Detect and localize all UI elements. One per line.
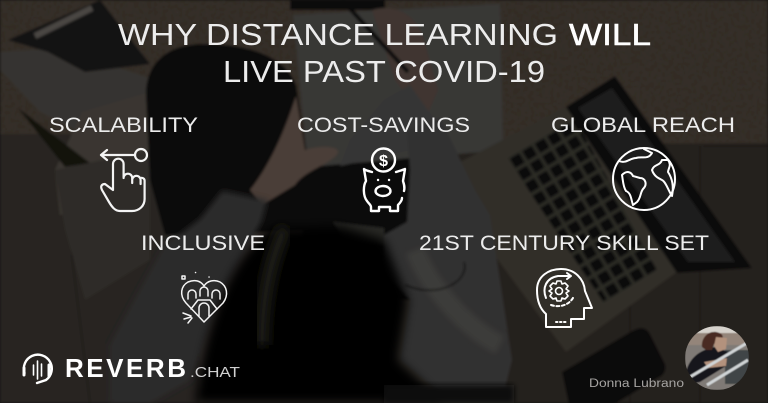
benefit: inclusive <box>141 232 265 323</box>
benefit: cost-savings <box>297 114 470 211</box>
bottom shadow <box>384 385 514 403</box>
title: LIVE PAST COVID-19 <box>223 54 545 89</box>
benefit: global reach <box>551 114 735 210</box>
sweater right <box>384 118 512 393</box>
heading: cost-savings: COST-SAVINGS <box>297 114 470 137</box>
author name: Donna Lubrano <box>589 378 684 390</box>
icon: piggy bank with coin <box>364 148 405 211</box>
sweater left <box>110 190 268 403</box>
title: WHY DISTANCE LEARNING <box>118 17 558 52</box>
hair <box>195 226 445 403</box>
heading: inclusive: INCLUSIVE <box>141 232 265 255</box>
icon: headset logo <box>24 355 52 383</box>
icon: piggy bank with coin: $ <box>379 153 388 170</box>
hair highlight <box>262 228 285 345</box>
wordmark: REVERB <box>65 353 186 383</box>
hand holding pen <box>372 8 438 120</box>
author photo <box>685 326 749 390</box>
author <box>589 326 749 390</box>
wood floor <box>0 134 768 403</box>
sleeve over notebook <box>340 85 435 166</box>
heading: global reach: GLOBAL REACH <box>551 114 735 137</box>
black trousers <box>146 44 340 235</box>
dark lap behind piggy icon <box>300 150 420 300</box>
logo: reverb.chat <box>24 353 240 383</box>
icon: globe <box>613 148 675 210</box>
benefit: 21st century skill set <box>419 232 709 327</box>
wordmark suffix: .CHAT <box>190 364 240 381</box>
left hand <box>250 96 338 205</box>
phone <box>562 328 665 403</box>
heading: scalability: SCALABILITY <box>49 114 198 137</box>
benefit: scalability <box>49 114 198 211</box>
sweater collar <box>333 222 384 245</box>
heading: 21st century skill set: 21ST CENTURY SKILL SET <box>419 232 709 255</box>
title <box>118 17 651 89</box>
papers and magazine <box>0 0 150 300</box>
title: WILL <box>569 17 651 52</box>
icon: swipe hand <box>101 149 147 211</box>
notebook <box>293 4 503 167</box>
laptop <box>435 76 752 352</box>
icon: heart with people <box>182 272 227 323</box>
icon: head with gear <box>537 269 592 327</box>
